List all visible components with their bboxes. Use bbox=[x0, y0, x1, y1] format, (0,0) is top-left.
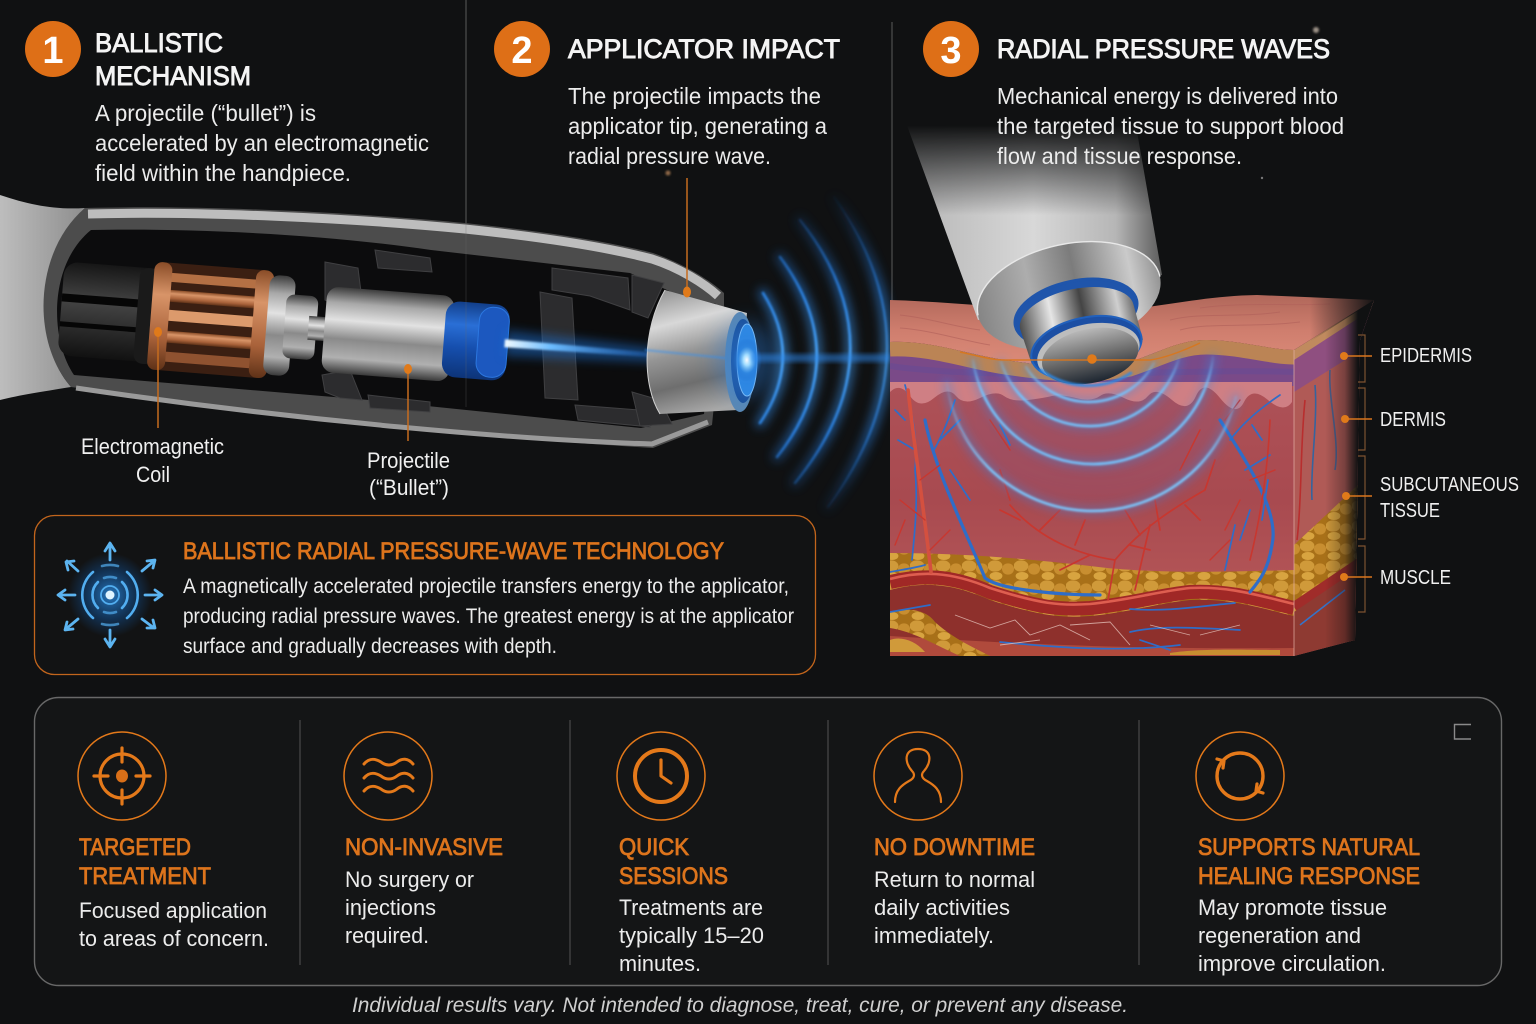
label: subcutaneous tissue bbox=[1380, 474, 1519, 522]
projectile blue tip bbox=[441, 301, 511, 381]
front corner highlight bbox=[1293, 350, 1295, 656]
purple layer bbox=[890, 350, 1294, 386]
label: electromagnetic coil: Electromagnetic bbox=[81, 434, 224, 459]
step 3 text bbox=[923, 21, 1344, 169]
main artery bbox=[890, 574, 1294, 609]
callout: applicator tip bbox=[683, 178, 691, 298]
description: Focused application bbox=[79, 898, 267, 923]
lower muscle band bbox=[890, 636, 1294, 656]
heading bbox=[1198, 834, 1420, 890]
electromagnetic coil bbox=[147, 262, 275, 379]
label: projectile bbox=[367, 448, 450, 500]
icon: cycle bbox=[1196, 732, 1284, 820]
applicator pressing on skin bbox=[909, 129, 1162, 384]
pink papillae bbox=[890, 382, 1292, 409]
layer brackets and labels bbox=[1340, 335, 1519, 612]
step 1 text bbox=[25, 21, 429, 186]
callout body: surface and gradually decreases with depth. bbox=[183, 635, 557, 658]
number badge 2: 2 bbox=[511, 30, 533, 72]
heading: ballistic mechanism: MECHANISM bbox=[95, 61, 251, 91]
shaft disc bbox=[282, 294, 319, 360]
description: injections bbox=[345, 895, 436, 920]
projectile body bbox=[321, 286, 455, 382]
heading: SUPPORTS NATURAL bbox=[1198, 834, 1420, 861]
heading: SESSIONS bbox=[619, 863, 728, 890]
outer shell bbox=[44, 207, 724, 448]
heading: HEALING RESPONSE bbox=[1198, 863, 1420, 890]
label: muscle: MUSCLE bbox=[1380, 567, 1451, 589]
internal frame parts bbox=[322, 250, 672, 427]
rear rods bbox=[57, 261, 164, 363]
shaft pin bbox=[307, 316, 329, 341]
callout: applicator contact line bbox=[960, 343, 1200, 364]
applicator cone bbox=[645, 290, 757, 414]
heading: TARGETED bbox=[79, 834, 191, 861]
heading: NO DOWNTIME bbox=[874, 834, 1035, 861]
back corner fade bbox=[1305, 293, 1378, 345]
number badge 2 bbox=[494, 21, 550, 77]
heading: ballistic mechanism bbox=[95, 28, 251, 91]
step 2 text bbox=[494, 21, 840, 169]
icon: radial wave emblem bbox=[58, 543, 162, 647]
benefit: quick sessions bbox=[617, 732, 764, 976]
body text step 3 bbox=[997, 83, 1344, 169]
tip face bbox=[1037, 319, 1144, 393]
front cross-section bbox=[890, 340, 1294, 660]
dark collar bbox=[133, 267, 160, 365]
handle bbox=[0, 195, 85, 400]
description: minutes. bbox=[619, 951, 701, 976]
flared bell bbox=[967, 226, 1171, 366]
description: improve circulation. bbox=[1198, 951, 1386, 976]
dermis marker bbox=[1341, 388, 1372, 450]
label: epidermis: EPIDERMIS bbox=[1380, 345, 1472, 367]
right side face bbox=[1294, 290, 1379, 660]
description: immediately. bbox=[874, 923, 994, 948]
epidermis marker bbox=[1340, 335, 1372, 382]
heading: TREATMENT bbox=[79, 863, 211, 890]
description bbox=[79, 898, 269, 951]
heading: applicator impact: APPLICATOR IMPACT bbox=[568, 34, 840, 64]
description bbox=[345, 867, 474, 948]
muscle fibres bbox=[955, 615, 1240, 645]
internal mechanism along the axis bbox=[57, 254, 663, 409]
heading: NON-INVASIVE bbox=[345, 834, 503, 861]
deep fat lobes bbox=[890, 610, 1280, 656]
blue haze around the waves bbox=[970, 392, 1216, 500]
heading bbox=[79, 834, 211, 890]
faint divider over handpiece bbox=[465, 225, 467, 407]
stray specks bbox=[666, 27, 1319, 179]
benefit: non-invasive bbox=[344, 732, 503, 948]
description: daily activities bbox=[874, 895, 1010, 920]
number badge 1: 1 bbox=[42, 30, 64, 72]
heading: ballistic mechanism: BALLISTIC bbox=[95, 28, 223, 58]
energy beam bbox=[504, 330, 660, 368]
callout heading: BALLISTIC RADIAL PRESSURE-WAVE TECHNOLOGY bbox=[183, 538, 724, 565]
body text step 3: flow and tissue response. bbox=[997, 143, 1242, 169]
callout: electromagnetic coil bbox=[154, 327, 162, 428]
collar and tip bbox=[1009, 269, 1152, 396]
callout body: A magnetically accelerated projectile transfers energy to the applicator, bbox=[183, 575, 789, 598]
divider between step 1 and step 2 bbox=[465, 0, 467, 225]
rear bearing bbox=[262, 275, 296, 376]
description bbox=[1198, 895, 1387, 976]
label: dermis: DERMIS bbox=[1380, 409, 1446, 431]
icon: clock bbox=[617, 732, 705, 820]
body text step 1: field within the handpiece. bbox=[95, 160, 351, 186]
subcutaneous marker bbox=[1342, 456, 1372, 539]
heading: QUICK bbox=[619, 834, 689, 861]
description: No surgery or bbox=[345, 867, 474, 892]
fat layer bbox=[890, 553, 1294, 617]
icon: person bbox=[874, 732, 962, 820]
description: regeneration and bbox=[1198, 923, 1361, 948]
radial pressure waves from applicator bbox=[760, 197, 887, 507]
skin top surface bbox=[890, 295, 1374, 367]
body text step 1: A projectile (“bullet”) is bbox=[95, 100, 316, 126]
body text step 2: radial pressure wave. bbox=[568, 143, 771, 169]
muscle layer bbox=[890, 584, 1294, 648]
description: to areas of concern. bbox=[79, 926, 269, 951]
number badge 3: 3 bbox=[940, 30, 962, 72]
illustration: handpiece cutaway bbox=[0, 195, 779, 448]
label: electromagnetic coil: Coil bbox=[136, 462, 170, 487]
footer disclaimer: Individual results vary. Not intended to diagnose, treat, cure, or prevent any disease. bbox=[352, 994, 1128, 1017]
silver lip bbox=[1032, 314, 1145, 390]
label: electromagnetic coil bbox=[81, 434, 224, 487]
epidermis band bbox=[890, 347, 1294, 374]
description bbox=[619, 895, 764, 976]
body text step 1 bbox=[95, 100, 429, 186]
dermis bbox=[890, 340, 1294, 572]
heading bbox=[619, 834, 728, 890]
pressure wave arcs in tissue bbox=[947, 357, 1236, 511]
silver collar bbox=[1014, 277, 1143, 364]
body text step 2 bbox=[568, 83, 827, 169]
icon: waves bbox=[344, 732, 432, 820]
description: Treatments are bbox=[619, 895, 763, 920]
benefit: supports natural healing response bbox=[1196, 732, 1420, 976]
description: required. bbox=[345, 923, 429, 948]
impact glow bbox=[715, 322, 779, 398]
benefit: no downtime bbox=[874, 732, 1035, 948]
description bbox=[874, 867, 1035, 948]
body text step 3: the targeted tissue to support blood bbox=[997, 113, 1344, 139]
illustration: skin tissue block bbox=[890, 290, 1379, 660]
description: May promote tissue bbox=[1198, 895, 1387, 920]
callout body: producing radial pressure waves. The greatest energy is at the applicator bbox=[183, 605, 794, 628]
lower blue ring bbox=[1025, 307, 1147, 389]
body text step 2: applicator tip, generating a bbox=[568, 113, 827, 139]
label: subcutaneous tissue: TISSUE bbox=[1380, 500, 1440, 522]
number badge 3 bbox=[923, 21, 979, 77]
upper blue ring bbox=[1009, 269, 1143, 357]
callout: projectile bbox=[404, 364, 412, 441]
inner cavity bbox=[57, 230, 716, 428]
blue veins bbox=[890, 385, 1280, 650]
muscle marker bbox=[1340, 546, 1372, 612]
description: typically 15–20 bbox=[619, 923, 764, 948]
red vessels bbox=[895, 390, 1275, 600]
callout body bbox=[183, 575, 794, 658]
body text step 3: Mechanical energy is delivered into bbox=[997, 83, 1338, 109]
label: projectile: Projectile bbox=[367, 448, 450, 473]
small square mark bbox=[1454, 724, 1471, 739]
heading: radial pressure waves: RADIAL PRESSURE WAVES bbox=[997, 34, 1330, 64]
body text step 1: accelerated by an electromagnetic bbox=[95, 130, 429, 156]
benefit: targeted treatment bbox=[78, 732, 269, 951]
panel: benefits bbox=[34, 698, 1502, 986]
body text step 2: The projectile impacts the bbox=[568, 83, 821, 109]
icon: target bbox=[78, 732, 166, 820]
applicator tube bbox=[905, 120, 1162, 320]
horizontal wave streak bbox=[750, 354, 890, 362]
description: Return to normal bbox=[874, 867, 1035, 892]
divider between step 2 and step 3 bbox=[891, 22, 893, 305]
number badge 1 bbox=[25, 21, 81, 77]
panel: technology callout bbox=[34, 516, 816, 674]
label: projectile: (“Bullet”) bbox=[369, 475, 449, 500]
